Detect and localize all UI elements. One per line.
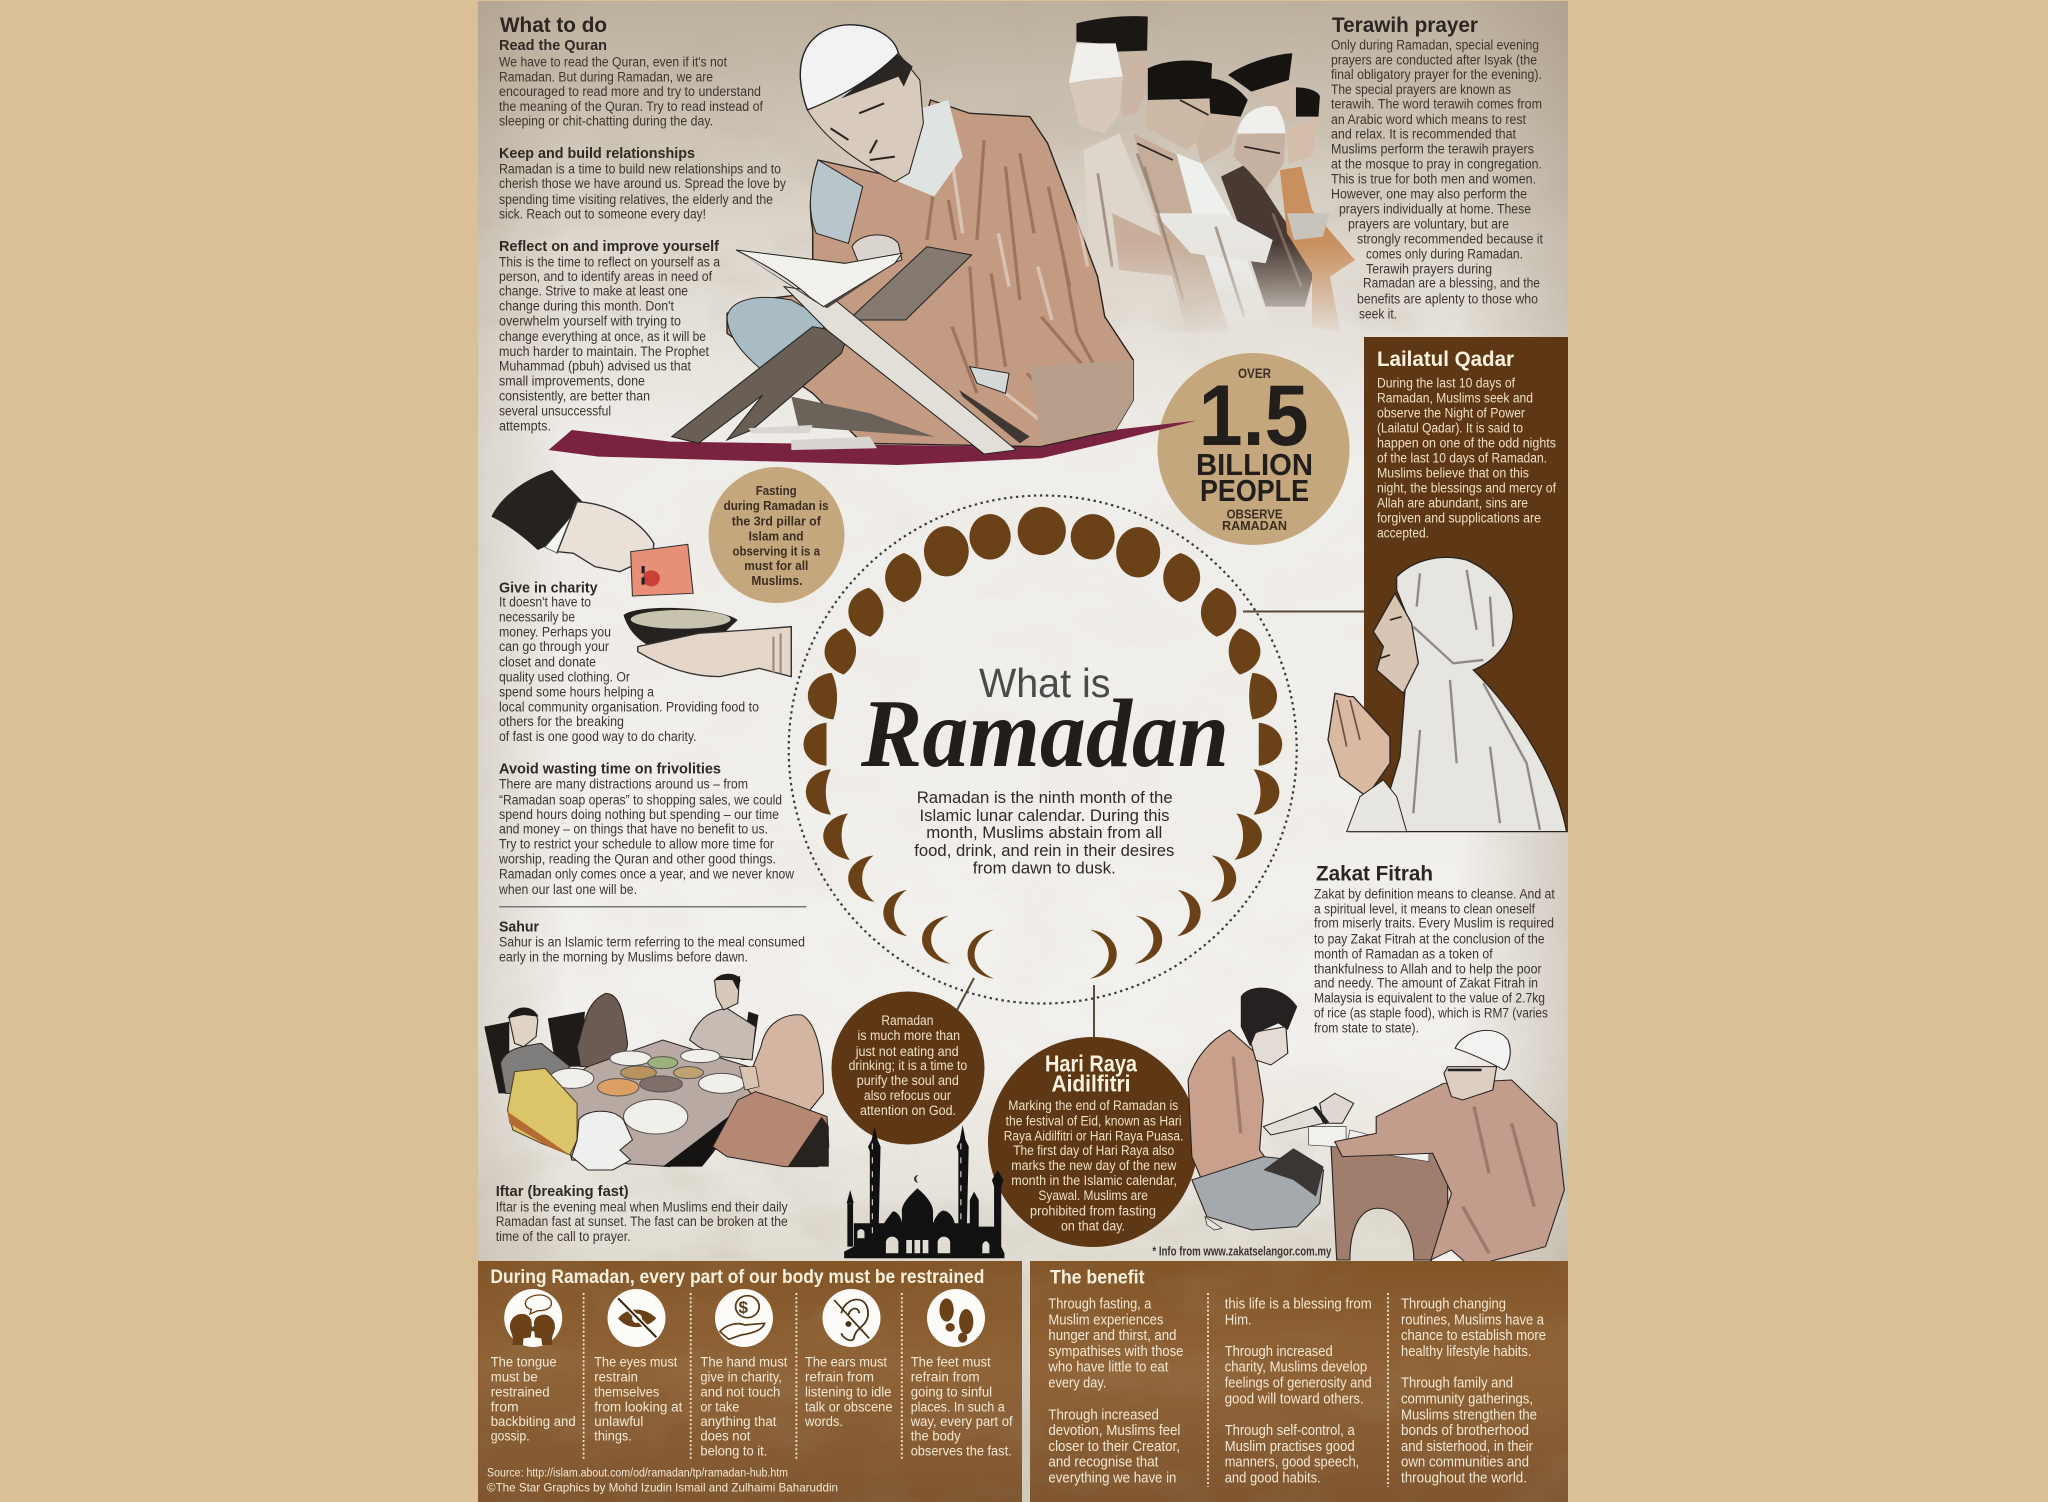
- text: Zakat Fitrah: to pay Zakat Fitrah at the conclusion of the: [1314, 931, 1545, 946]
- body: Lailatul Qadar: night, the blessings and mercy of: [1377, 480, 1556, 495]
- section: Reflect on and improve yourself: consistently, are better than: [499, 388, 650, 403]
- shirt and body: [727, 100, 1133, 447]
- text: Ramadan definition: month, Muslims abstain from all: [926, 823, 1162, 842]
- benefit column 1: everything we have in: [1048, 1471, 1176, 1487]
- text: Avoid wasting time on frivolities: Avoid wasting time on frivolities: [499, 760, 721, 777]
- text: eyes: The eyes must: [594, 1355, 678, 1370]
- benefit column 3: and sisterhood, in their: [1401, 1439, 1533, 1455]
- text: Avoid wasting time on frivolities: worship, reading the Quran and other good things.: [498, 851, 776, 866]
- callout: much more than not eating: drinking; it is a time to: [849, 1058, 967, 1073]
- text: Zakat Fitrah: and needy. The amount of Zakat Fitrah in: [1314, 976, 1538, 991]
- text: Give in charity: [499, 579, 759, 744]
- callout: Hari Raya Aidilfitri: marks the new day of the new: [1011, 1158, 1177, 1173]
- connector line to Lailatul Qadar: [1243, 610, 1364, 612]
- text: eyes: restrain: [594, 1370, 638, 1385]
- section: Reflect on and improve yourself: change. Strive to make at least one: [499, 284, 688, 299]
- callout: Hari Raya Aidilfitri: Syawal. Muslims are: [1038, 1188, 1148, 1203]
- text: Sahur: early in the morning by Muslims before dawn.: [499, 950, 748, 965]
- callout: fasting pillar: [708, 467, 844, 603]
- callout: much more than not eating: just not eating and: [855, 1044, 959, 1059]
- text: Ramadan definition: [914, 788, 1174, 878]
- callout: fasting pillar: must for all: [744, 558, 808, 573]
- text: Give in charity: It doesn't have to: [499, 595, 591, 610]
- callout: much more than not eating: attention on God.: [860, 1103, 956, 1118]
- text: feet: the body: [911, 1429, 961, 1444]
- text: Ramadan definition: Ramadan is the ninth month of the: [917, 788, 1173, 807]
- text: Zakat Fitrah: [1314, 863, 1555, 1036]
- body: Lailatul Qadar: Allah are abundant, sins are: [1377, 495, 1528, 510]
- text: Ramadan definition: food, drink, and rein in their desires: [914, 841, 1174, 860]
- icon: hand and coin: [715, 1289, 773, 1347]
- benefit column 3: routines, Muslims have a: [1401, 1312, 1545, 1328]
- cap: [800, 25, 898, 110]
- Quran stand: [848, 247, 972, 320]
- text: tongue: must be: [491, 1370, 538, 1385]
- text: Ramadan definition: from dawn to dusk.: [973, 859, 1116, 878]
- text: Zakat Fitrah: from state to state).: [1314, 1021, 1419, 1036]
- text: Avoid wasting time on frivolities: and money – on things that have no benefit to us.: [499, 821, 768, 836]
- body: Lailatul Qadar: observe the Night of Power: [1377, 405, 1525, 420]
- reading hand: [852, 235, 902, 273]
- text: ears: listening to idle: [805, 1385, 891, 1400]
- section: Reflect on and improve yourself: This is the time to reflect on yourself as a: [499, 255, 720, 270]
- section: Read the Quran: [499, 37, 763, 129]
- heading: What to do: What to do: [500, 14, 607, 37]
- body: Terawih prayer: This is true for both men and women.: [1331, 171, 1536, 186]
- text: ears: talk or obscene: [805, 1400, 892, 1415]
- text: Give in charity: necessarily be: [499, 610, 575, 625]
- benefit column 2: this life is a blessing from: [1225, 1296, 1372, 1312]
- body: Terawih prayer: terawih. The word terawih comes from: [1331, 97, 1542, 112]
- benefit column 3: [1401, 1296, 1546, 1487]
- section: Keep and build relationships: Ramadan is a time to build new relationships and to: [499, 161, 781, 176]
- text: Zakat Fitrah: of rice (as staple food), which is RM7 (varies: [1314, 1006, 1548, 1021]
- heading: The benefit: The benefit: [1050, 1267, 1145, 1288]
- callout: 1.5 billion people: PEOPLE: [1200, 473, 1309, 508]
- prayer rug: [549, 421, 1196, 465]
- benefit column 2: Through self-control, a: [1225, 1423, 1356, 1439]
- source credits: [487, 1468, 838, 1495]
- text: Avoid wasting time on frivolities: Try to restrict your schedule to allow more time for: [499, 836, 774, 851]
- bluish sleeve and left leg: [810, 160, 863, 243]
- benefit column 3: Through changing: [1401, 1296, 1506, 1312]
- text: Give in charity: Give in charity: [499, 579, 598, 596]
- source credits: ©The Star Graphics by Mohd Izudin Ismail and Zulhaimi Baharuddin: [487, 1481, 838, 1495]
- body: Terawih prayer: seek it.: [1359, 306, 1397, 321]
- benefit column 1: Through fasting, a: [1048, 1296, 1152, 1312]
- text: eyes: unlawful: [594, 1414, 643, 1429]
- text: Iftar: Iftar (breaking fast): [496, 1183, 629, 1200]
- benefit column 3: throughout the world.: [1401, 1471, 1527, 1487]
- text: hand: [700, 1355, 788, 1459]
- heading: Lailatul Qadar: Lailatul Qadar: [1377, 348, 1514, 371]
- callout: 1.5 billion people: 1.5: [1199, 368, 1309, 464]
- body: Lailatul Qadar: of the last 10 days of Ramadan.: [1377, 450, 1547, 465]
- body: Terawih prayer: [1331, 37, 1543, 321]
- body: Terawih prayer: Muslims perform the terawih prayers: [1331, 142, 1534, 157]
- benefit column 2: feelings of generosity and: [1225, 1376, 1372, 1392]
- text: eyes: things.: [594, 1429, 632, 1444]
- text: Give in charity: others for the breaking: [499, 714, 624, 729]
- illustration: family at iftar table: [484, 974, 829, 1170]
- section: Keep and build relationships: spending time visiting relatives, the elderly and the: [499, 192, 773, 207]
- callout: fasting pillar: observing it is a: [732, 544, 821, 559]
- benefit column 3: healthy lifestyle habits.: [1401, 1344, 1532, 1360]
- body: Terawih prayer: prayers individually at home. These: [1339, 201, 1531, 216]
- poster background: [478, 1, 1568, 1502]
- text: tongue: from: [491, 1400, 519, 1415]
- section: Keep and build relationships: cherish those we have around us. Spread the love by: [499, 176, 786, 191]
- text: Avoid wasting time on frivolities: [498, 760, 794, 897]
- text: Give in charity: of fast is one good way to do charity.: [499, 729, 696, 744]
- text: feet: going to sinful: [911, 1385, 992, 1400]
- section: Reflect on and improve yourself: several unsuccessful: [499, 403, 611, 418]
- text: Iftar: time of the call to prayer.: [496, 1229, 631, 1244]
- section: Read the Quran: We have to read the Quran, even if it's not: [499, 55, 727, 70]
- body: Lailatul Qadar: Ramadan, Muslims seek and: [1377, 390, 1533, 405]
- text: feet: [910, 1355, 1013, 1459]
- illustration: man reading the Quran on a prayer rug: [549, 25, 1196, 465]
- text: Avoid wasting time on frivolities: spend hours doing nothing but spending – our time: [499, 807, 779, 822]
- callout: Hari Raya Aidilfitri: [988, 1037, 1198, 1247]
- benefit column 3: bonds of brotherhood: [1401, 1423, 1529, 1439]
- text: Sahur: [499, 919, 805, 965]
- body: Lailatul Qadar: During the last 10 days of: [1377, 375, 1515, 390]
- benefit column 2: charity, Muslims develop: [1225, 1360, 1367, 1376]
- benefit column 3: own communities and: [1401, 1455, 1529, 1471]
- text: Avoid wasting time on frivolities: Ramadan only comes once a year, and we never know: [499, 866, 794, 881]
- callout: Hari Raya Aidilfitri: The first day of Hari Raya also: [1013, 1143, 1174, 1158]
- body: Terawih prayer: Ramadan are a blessing, and the: [1363, 276, 1540, 291]
- icon: talking heads: [504, 1289, 562, 1347]
- illustration: hands giving money and holding a bowl: [491, 470, 791, 677]
- section: Keep and build relationships: sick. Reach out to someone every day!: [499, 207, 706, 222]
- text: Zakat Fitrah: from miserly traits. Every Muslim is required: [1314, 916, 1554, 931]
- callout: Hari Raya Aidilfitri: Marking the end of Ramadan is: [1008, 1098, 1179, 1113]
- text: hand: belong to it.: [700, 1444, 767, 1459]
- section: Reflect on and improve yourself: change during this month. Don't: [499, 299, 674, 314]
- benefit column 1: hunger and thirst, and: [1048, 1328, 1176, 1344]
- illustration: men praying terawih: [1069, 16, 1355, 333]
- callout: 1.5 billion people: OBSERVE: [1227, 507, 1283, 522]
- body: Terawih prayer: and relax. It is recommended that: [1331, 127, 1516, 142]
- text: feet: The feet must: [911, 1355, 991, 1370]
- section: Reflect on and improve yourself: much harder to maintain. The Prophet: [499, 344, 709, 359]
- callout: Hari Raya Aidilfitri: Hari Raya: [1045, 1051, 1137, 1077]
- benefit column 2: Him.: [1225, 1312, 1252, 1328]
- heading: body restraint: During Ramadan, every part of our body must be restrained: [490, 1267, 984, 1288]
- text: feet: observes the fast.: [911, 1444, 1012, 1459]
- icon: crossed ear: [822, 1289, 880, 1347]
- benefit column 1: sympathises with those: [1048, 1344, 1183, 1360]
- connector lines from moons to bubbles: [957, 978, 1094, 1037]
- section: Reflect on and improve yourself: change everything at once, as it will be: [499, 329, 706, 344]
- body: Terawih prayer: prayers are voluntary, but are: [1348, 216, 1509, 231]
- text: Sahur: Sahur: [499, 919, 539, 936]
- text: Terawih prayer: [1331, 14, 1543, 321]
- text: Avoid wasting time on frivolities: “Ramadan soap operas” to shopping sales, we could: [499, 792, 782, 807]
- body: Terawih prayer: Only during Ramadan, special evening: [1331, 37, 1539, 52]
- body: Terawih prayer: final obligatory prayer for the evening).: [1331, 67, 1542, 82]
- panel: the benefit: [1030, 1261, 1568, 1502]
- body: Terawih prayer: However, one may also perform the: [1331, 186, 1527, 201]
- text: Give in charity: closet and donate: [499, 655, 596, 670]
- text: ears: The ears must: [805, 1355, 887, 1370]
- text: ears: refrain from: [805, 1370, 874, 1385]
- section: Read the Quran: encouraged to read more and try to understand: [499, 84, 761, 99]
- callout: fasting pillar: during Ramadan is: [724, 498, 829, 513]
- benefit column 2: manners, good speech,: [1225, 1455, 1359, 1471]
- text: Zakat Fitrah: Zakat by definition means to cleanse. And at: [1314, 886, 1555, 901]
- text: eyes: [594, 1355, 683, 1444]
- moon phases ring: [789, 496, 1297, 1004]
- body: Terawih prayer: The special prayers are known as: [1331, 82, 1511, 97]
- benefit column 3: chance to establish more: [1401, 1328, 1546, 1344]
- benefit column 1: who have little to eat: [1047, 1360, 1168, 1376]
- body: Lailatul Qadar: happen on one of the odd nights: [1377, 435, 1556, 450]
- section: Keep and build relationships: [499, 145, 786, 222]
- benefit column 1: devotion, Muslims feel: [1048, 1423, 1180, 1439]
- text: Give in charity: quality used clothing. Or: [499, 670, 630, 685]
- callout: much more than not eating: [832, 992, 984, 1144]
- text: hand: give in charity,: [700, 1370, 782, 1385]
- body: Terawih prayer: strongly recommended because it: [1357, 231, 1543, 246]
- callout: Hari Raya Aidilfitri: month in the Islamic calendar,: [1011, 1173, 1177, 1188]
- text: Avoid wasting time on frivolities: when our last one will be.: [498, 882, 637, 897]
- callout: Hari Raya Aidilfitri: on that day.: [1061, 1219, 1125, 1234]
- callout: much more than not eating: Ramadan: [881, 1013, 933, 1028]
- section: Keep and build relationships: Keep and build relationships: [499, 145, 695, 162]
- icon: crossed eye: [608, 1289, 666, 1347]
- callout: 1.5 billion people: RAMADAN: [1222, 518, 1287, 533]
- text: Avoid wasting time on frivolities: There are many distractions around us – from: [499, 776, 748, 791]
- title: What is Ramadan: Ramadan: [860, 680, 1229, 788]
- body: Lailatul Qadar: (Lailatul Qadar). It is said to: [1377, 420, 1523, 435]
- panel: Lailatul Qadar: [1328, 337, 1568, 832]
- benefit column 3: Muslims strengthen the: [1401, 1407, 1537, 1423]
- section: Reflect on and improve yourself: Muhammad (pbuh) advised us that: [499, 359, 691, 374]
- benefit column 1: closer to their Creator,: [1048, 1439, 1180, 1455]
- text: tongue: The tongue: [491, 1355, 557, 1370]
- benefit column 2: Muslim practises good: [1225, 1439, 1355, 1455]
- face: [807, 53, 923, 182]
- body: Terawih prayer: comes only during Ramadan.: [1366, 246, 1523, 261]
- benefit column 1: Through increased: [1048, 1407, 1159, 1423]
- text: Give in charity: money. Perhaps you: [499, 625, 611, 640]
- body: Lailatul Qadar: [1377, 375, 1556, 540]
- callout: fasting pillar: Muslims.: [751, 573, 802, 588]
- section: Reflect on and improve yourself: small improvements, done: [499, 373, 645, 388]
- text: eyes: from looking at: [594, 1400, 683, 1415]
- section: Reflect on and improve yourself: [499, 238, 720, 434]
- callout: 1.5 billion people: BILLION: [1196, 447, 1313, 482]
- text: hand: The hand must: [700, 1355, 788, 1370]
- text: Iftar: Ramadan fast at sunset. The fast can be broken at the: [496, 1214, 788, 1229]
- text: hand: anything that: [700, 1414, 777, 1429]
- body: Terawih prayer: prayers are conducted after Isyak (the: [1331, 52, 1537, 67]
- callout: 1.5 billion people: [1158, 353, 1350, 545]
- text: Iftar: [496, 1183, 788, 1244]
- text: tongue: [491, 1355, 576, 1444]
- benefit column 1: every day.: [1048, 1376, 1106, 1392]
- illustration: mosque silhouette: [844, 1125, 1004, 1258]
- text: Sahur: Sahur is an Islamic term referring to the meal consumed: [499, 935, 805, 950]
- benefit column 2: and good habits.: [1225, 1471, 1321, 1487]
- source credits: Source: http://islam.about.com/od/ramadan/tp/ramadan-hub.htm: [487, 1468, 788, 1480]
- text: Give in charity: local community organisation. Providing food to: [499, 700, 759, 715]
- callout: fasting pillar: Fasting: [756, 483, 797, 498]
- section: Reflect on and improve yourself: person, and to identify areas in need of: [499, 269, 712, 284]
- callout: fasting pillar: the 3rd pillar of: [732, 513, 821, 528]
- note: zakat source: * Info from www.zakatselangor.com.my: [1152, 1245, 1331, 1259]
- body: Lailatul Qadar: accepted.: [1377, 525, 1429, 540]
- benefit column 3: community gatherings,: [1401, 1391, 1533, 1407]
- text: ears: words.: [804, 1414, 843, 1429]
- text: Zakat Fitrah: Malaysia is equivalent to the value of 2.7kg: [1314, 991, 1545, 1006]
- text: Give in charity: can go through your: [499, 639, 609, 654]
- benefit column 1: [1047, 1296, 1183, 1487]
- text: ears: [804, 1355, 892, 1429]
- icon: footprints: [927, 1289, 985, 1347]
- callout: Hari Raya Aidilfitri: Aidilfitri: [1052, 1071, 1130, 1097]
- callout: Hari Raya Aidilfitri: prohibited from fasting: [1030, 1204, 1156, 1219]
- heading: Terawih prayer: Terawih prayer: [1332, 14, 1478, 37]
- callout: much more than not eating: purify the soul and: [857, 1073, 959, 1088]
- benefit column 2: good will toward others.: [1225, 1391, 1364, 1407]
- callout: much more than not eating: is much more than: [858, 1028, 960, 1043]
- text: hand: does not: [700, 1429, 751, 1444]
- benefit column 2: [1225, 1296, 1372, 1487]
- text: hand: and not touch: [700, 1385, 780, 1400]
- text: feet: refrain from: [911, 1370, 980, 1385]
- text: Zakat Fitrah: a spiritual level, it means to clean oneself: [1314, 901, 1535, 916]
- text: tongue: backbiting and: [491, 1414, 576, 1429]
- benefit column 1: and recognise that: [1048, 1455, 1158, 1471]
- section: Read the Quran: Ramadan. But during Ramadan, we are: [499, 70, 713, 84]
- title: What is Ramadan: What is: [979, 660, 1110, 706]
- body: Lailatul Qadar: Muslims believe that on this: [1377, 465, 1529, 480]
- icon: hand and coin: $: [738, 1298, 748, 1317]
- body: Terawih prayer: an Arabic word which means to rest: [1331, 112, 1526, 127]
- section: Reflect on and improve yourself: overwhelm yourself with trying to: [499, 314, 681, 329]
- section: Read the Quran: Read the Quran: [499, 37, 607, 54]
- callout: Hari Raya Aidilfitri: Raya Aidilfitri or Hari Raya Puasa.: [1004, 1129, 1183, 1144]
- section: Reflect on and improve yourself: Reflect on and improve yourself: [499, 238, 720, 255]
- body: Terawih prayer: Terawih prayers during: [1366, 261, 1492, 276]
- section: Reflect on and improve yourself: attempts.: [499, 419, 551, 434]
- callout: Hari Raya Aidilfitri: the festival of Eid, known as Hari: [1006, 1114, 1182, 1129]
- callout: much more than not eating: also refocus our: [864, 1088, 951, 1103]
- text: Zakat Fitrah: Zakat Fitrah: [1316, 863, 1433, 886]
- text: hand: or take: [700, 1400, 739, 1415]
- text: feet: way, every part of: [910, 1414, 1013, 1429]
- body: Lailatul Qadar: forgiven and supplications are: [1377, 510, 1541, 525]
- body: Terawih prayer: at the mosque to pray in congregation.: [1331, 156, 1542, 171]
- illustration: woman praying: [1328, 557, 1567, 832]
- text: tongue: restrained: [491, 1385, 550, 1400]
- collar: [898, 100, 963, 197]
- illustration: two men paying zakat: [1188, 988, 1564, 1270]
- text: Give in charity: spend some hours helping a: [499, 685, 654, 700]
- text: Zakat Fitrah: thankfulness to Allah and to help the poor: [1314, 961, 1542, 976]
- text: Zakat Fitrah: month of Ramadan as a token of: [1314, 946, 1493, 961]
- panel: body must be restrained: [478, 1261, 1022, 1502]
- callout: 1.5 billion people: OVER: [1238, 366, 1271, 381]
- text: feet: places. In such a: [911, 1400, 1005, 1415]
- section: Read the Quran: sleeping or chit-chatting during the day.: [499, 114, 713, 129]
- text: What to do: [499, 14, 786, 434]
- text: tongue: gossip.: [491, 1429, 530, 1444]
- body: Terawih prayer: benefits are aplenty to those who: [1357, 291, 1538, 306]
- text: eyes: themselves: [594, 1385, 660, 1400]
- benefit column 1: Muslim experiences: [1048, 1312, 1163, 1328]
- text: Iftar: Iftar is the evening meal when Muslims end their daily: [496, 1200, 788, 1215]
- text: Ramadan definition: Islamic lunar calendar. During this: [920, 806, 1170, 825]
- callout: fasting pillar: Islam and: [749, 529, 804, 544]
- benefit column 3: Through family and: [1401, 1376, 1513, 1392]
- section: Read the Quran: the meaning of the Quran. Try to read instead of: [499, 99, 763, 114]
- benefit column 2: Through increased: [1225, 1344, 1333, 1360]
